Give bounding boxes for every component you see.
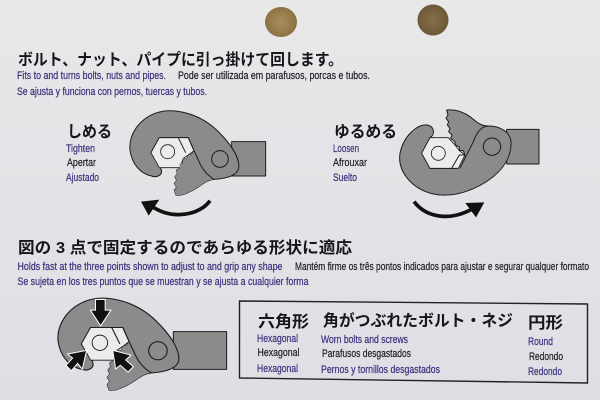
label: loosen: Suelto [333,172,357,184]
column: worn bolts and screws: Pernos y tornillos desgastados [321,364,440,376]
label: tighten: しめる [67,123,112,141]
column: round: Redondo [529,351,563,363]
column: hexagonal: Hexagonal [257,363,298,375]
icon: wrench loosening a nut [400,110,539,195]
description block: three-point grip: Se sujeta en los tres puntos que se muestran y se ajusta a cualquier forma [18,276,309,288]
label: loosen: Loosen [333,143,359,155]
column: worn bolts and screws: Worn bolts and screws [321,334,408,346]
description block: usage: Se ajusta y funciona con pernos, tuercas y tubos. [17,86,207,98]
heading: usage: ボルト、ナット、パイプに引っ掛けて回します。 [18,50,343,69]
column: round: 円形 [528,314,563,332]
column: hexagonal: Hexagonal [258,347,300,359]
arrow: counter-clockwise [141,200,210,216]
label: tighten: Tighten [66,143,95,155]
column: hexagonal: Hexagonal [257,333,298,345]
column: worn bolts and screws: Parafusos desgastados [322,348,411,360]
label: tighten: Apertar [67,157,96,169]
column: hexagonal [257,312,309,375]
label: loosen: ゆるめる [334,123,397,141]
arrow: lower-right grip point [113,351,133,371]
arrow: clockwise [414,202,484,217]
description block: usage: Fits to and turns bolts, nuts and pipes. [17,70,166,82]
column: hexagonal: 六角形 [258,312,309,331]
column: worn bolts and screws: 角がつぶれたボルト・ネジ [323,311,513,330]
arrow: lower-left grip point [67,351,86,370]
hanging hole right [418,4,448,36]
description block: usage [17,70,370,98]
arrow: top grip point [91,300,110,325]
column: round [528,314,563,378]
description block: usage: Pode ser utilizada em parafusos, porcas e tubos. [178,70,370,82]
icon: wrench tightening a nut [130,111,266,195]
hanging hole left [265,7,297,37]
description block: three-point grip: Holds fast at the three points shown to adjust to and grip any shape [18,261,282,273]
description block: three-point grip [18,261,589,288]
icon: wrench with three grip points [58,298,227,390]
column: round: Redondo [528,366,562,378]
panel: compatible shapes [240,301,588,383]
column: worn bolts and screws [321,311,513,376]
heading: three-point grip: 図の 3 点で固定するのであらゆる形状に適応 [18,238,352,257]
label: tighten: Ajustado [66,172,99,184]
column: round: Round [528,336,553,348]
label: tighten [66,123,112,184]
label: loosen: Afrouxar [333,157,367,169]
label: loosen [333,123,397,184]
